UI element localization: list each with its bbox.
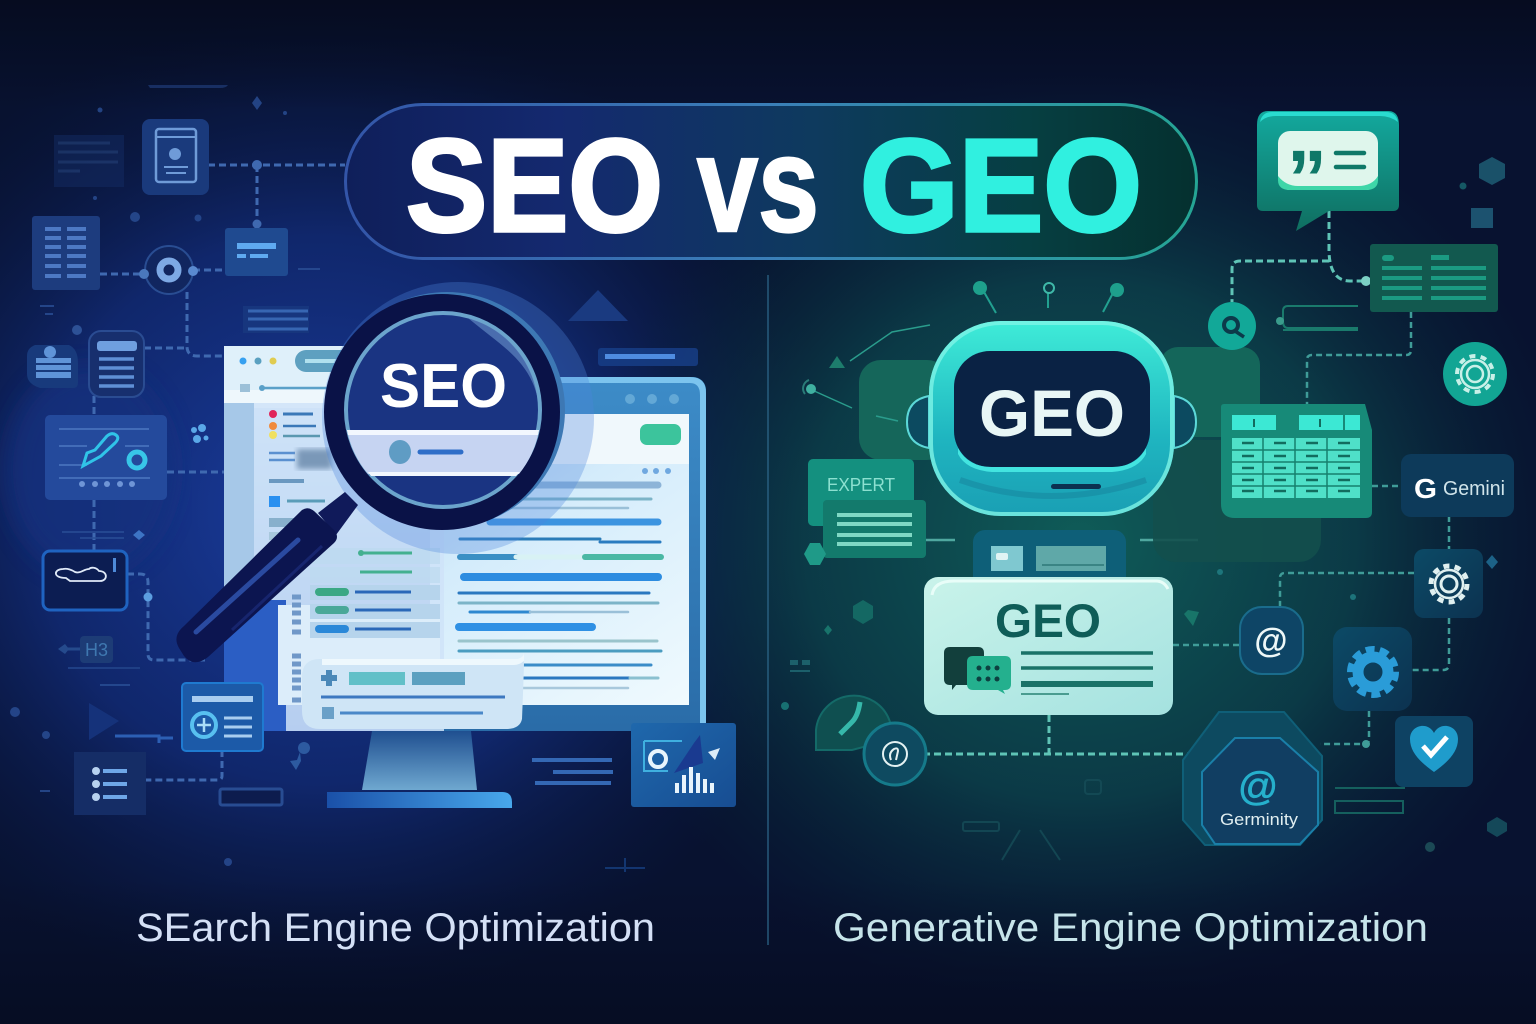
icon: document card xyxy=(142,119,209,195)
icon: link panel xyxy=(45,415,167,500)
icon: node dots xyxy=(803,356,845,394)
popup card xyxy=(302,653,524,729)
icon: H3 tag: H3 xyxy=(85,640,108,660)
title: GEO: GEO xyxy=(860,112,1142,259)
divider line xyxy=(767,275,769,945)
robot xyxy=(907,321,1196,590)
icon: small pin xyxy=(290,742,310,770)
robot screen xyxy=(954,351,1150,467)
icon: list document xyxy=(89,331,144,397)
icon: heart check card xyxy=(1395,716,1473,787)
robot screen text GEO: GEO xyxy=(979,376,1125,450)
robot mouth xyxy=(1051,484,1101,489)
robot antennas xyxy=(973,281,1124,313)
green pill button xyxy=(640,424,681,445)
magnifier lens xyxy=(346,313,540,507)
icon: faded play triangle xyxy=(89,703,119,740)
icon: outline rectangle xyxy=(220,789,282,805)
monitor page xyxy=(256,414,689,705)
faded triangle xyxy=(568,290,628,321)
icon: faded text block xyxy=(243,306,309,333)
icon: cloud card xyxy=(43,551,127,610)
Germinity at sign: @ xyxy=(1238,765,1278,809)
icon: bullet list card xyxy=(74,752,146,815)
Gemini card xyxy=(1401,454,1514,517)
icon: gear card xyxy=(1414,549,1483,618)
icon: small line node xyxy=(62,530,145,540)
icon: small heading card xyxy=(225,228,288,276)
subtitle: generative engine optimization: Generative Engine Optimization xyxy=(833,906,1428,950)
icon: chart card xyxy=(631,723,736,807)
speech bubble icon xyxy=(1257,111,1399,231)
left connector lines xyxy=(94,160,345,780)
icon: target circle xyxy=(139,246,198,294)
browser back window xyxy=(224,346,430,731)
GEO card heading: GEO xyxy=(995,594,1101,647)
icon: plus card xyxy=(182,683,263,751)
title: vs: vs xyxy=(697,108,819,260)
Gemini G: G xyxy=(1414,473,1437,504)
icon: table panel xyxy=(32,216,100,290)
icon: H3 tag xyxy=(58,636,140,668)
magnifier handle xyxy=(176,492,358,662)
Germinity label: Germinity xyxy=(1220,810,1299,829)
monitor and browser xyxy=(224,346,706,731)
GEO card text lines xyxy=(1021,653,1153,668)
left scatter dots xyxy=(10,85,320,866)
robot head xyxy=(929,321,1174,516)
at sign: @ xyxy=(1254,622,1288,660)
magnifier soft shadow xyxy=(322,282,594,554)
article lines xyxy=(459,485,661,688)
browser toolbar xyxy=(240,384,250,392)
robot body xyxy=(973,530,1126,590)
subtitle: search engine optimization: SEarch Engine Optimization xyxy=(136,906,655,950)
icon: at card xyxy=(1240,607,1303,674)
icon: store box xyxy=(27,325,82,388)
icon: at circle xyxy=(816,696,926,785)
monitor stand xyxy=(327,731,512,808)
icon: color dots xyxy=(191,424,208,443)
faded bottom circuit xyxy=(605,780,1101,872)
icon: green list panel xyxy=(1370,244,1498,312)
lens text SEO: SEO xyxy=(380,352,507,421)
right scatter dots xyxy=(781,157,1507,852)
browser traffic dots xyxy=(240,358,246,364)
magnifying glass xyxy=(176,282,594,662)
icon: blue gear card xyxy=(1333,627,1412,711)
quote marks: ” xyxy=(1287,134,1327,223)
Germinity badge xyxy=(1183,712,1322,845)
sidebar rows xyxy=(292,548,440,700)
icon: faded list panel xyxy=(54,135,124,187)
Gemini label: Gemini xyxy=(1443,478,1505,500)
icon: gear badge xyxy=(1443,342,1507,406)
back panels behind robot xyxy=(859,347,1321,562)
GEO card xyxy=(924,577,1173,715)
thin tech lines left of robot xyxy=(812,325,930,421)
title pill xyxy=(346,104,1196,260)
robot ears xyxy=(907,396,929,448)
sidebar items xyxy=(269,410,277,418)
table card xyxy=(1221,404,1372,518)
chat icon xyxy=(944,647,1011,694)
expert text: EXPERT xyxy=(827,475,895,495)
expert doc xyxy=(823,500,926,558)
page dots xyxy=(642,468,671,474)
small outline lines bottom right xyxy=(1335,788,1405,813)
right connector lines xyxy=(898,211,1449,754)
expert card xyxy=(804,459,926,565)
small pointer line xyxy=(115,736,173,743)
small side text bars xyxy=(532,348,698,783)
browser address bar xyxy=(295,350,365,372)
magnifier ring xyxy=(329,292,565,528)
icon: search badge xyxy=(1208,302,1256,350)
monitor dots xyxy=(625,394,679,404)
title: SEO: SEO xyxy=(406,112,663,259)
icon: small outline lines xyxy=(1276,306,1358,330)
